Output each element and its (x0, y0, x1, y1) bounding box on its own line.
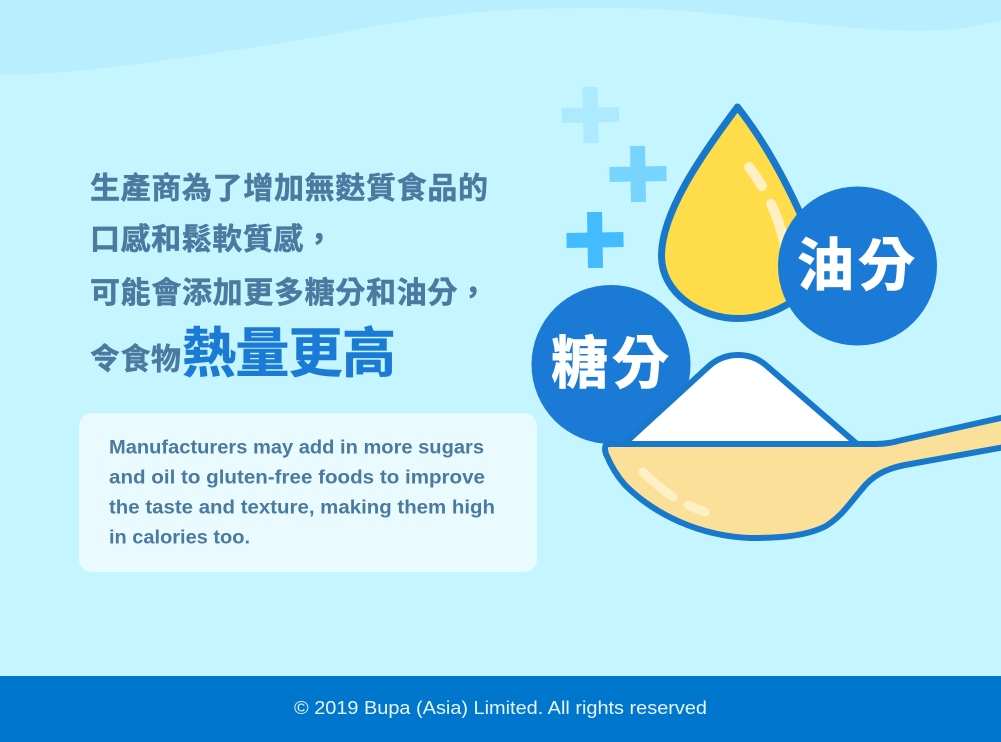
icon: sugar pile (624, 355, 857, 444)
top wave (0, 0, 1001, 75)
badge: sugar (532, 285, 690, 444)
icon: spoon (605, 417, 1001, 538)
icon: oil drop (662, 107, 815, 318)
badge: oil (778, 186, 937, 346)
heading text (90, 172, 488, 384)
english callout card: the taste and texture, making them high (109, 498, 495, 518)
english callout card (79, 413, 537, 572)
heading text: 令食物 (90, 344, 181, 376)
footer bar: © 2019 Bupa (Asia) Limited. All rights reserved (294, 698, 707, 718)
badge: oil: 油分 (797, 234, 915, 298)
icon: plus signs (562, 87, 667, 268)
english callout card: in calories too. (109, 528, 250, 548)
heading text: 可能會添加更多糖分和油分， (90, 277, 488, 310)
footer bar (0, 676, 1001, 742)
english callout card: and oil to gluten-free foods to improve (109, 468, 485, 488)
heading text: 口感和鬆軟質感， (90, 222, 334, 256)
badge: sugar: 糖分 (551, 332, 669, 396)
english callout card: Manufacturers may add in more sugars (109, 438, 484, 458)
heading text: 生產商為了增加無麩質食品的 (90, 172, 488, 206)
heading highlight: 熱量更高 (182, 324, 396, 384)
